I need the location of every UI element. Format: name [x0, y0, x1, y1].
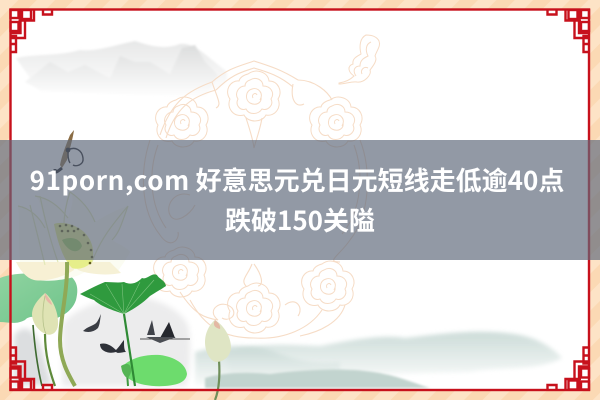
stems	[33, 262, 219, 400]
cloud motif: top	[228, 71, 280, 121]
cloud ring medallion	[143, 61, 367, 338]
grey title band	[0, 140, 600, 260]
cloud motif: upper right	[310, 97, 362, 147]
corner fret: top right	[548, 10, 589, 52]
corner fret: top left	[10, 10, 52, 52]
ink fish: upper	[83, 314, 101, 332]
ink mountains: top left	[16, 41, 227, 98]
cloud motif: lower right	[302, 261, 354, 311]
small flying cloud	[339, 35, 380, 84]
cloud motif: bottom	[228, 283, 280, 333]
dragonfly	[55, 130, 83, 172]
light green lotus leaf	[0, 272, 77, 323]
cloud motif: lower left	[154, 247, 206, 297]
connecting scroll lines	[143, 61, 367, 338]
ink mountains: bottom right	[195, 332, 562, 388]
title	[30, 161, 564, 238]
central dark green lotus leaf	[80, 274, 166, 314]
lotus bud: left	[32, 293, 58, 335]
ink fish: lower	[100, 340, 126, 353]
lotus bud: right	[205, 320, 231, 362]
lotus seed pod	[54, 223, 93, 269]
corner fret: bottom right	[548, 348, 589, 390]
lotus flower	[16, 192, 130, 281]
title: 91porn,com 好意思元兑日元短线走低逾40点	[30, 161, 564, 198]
small lily leaf	[121, 364, 131, 378]
ink sailboats	[140, 320, 190, 343]
ink wash behind lotus	[14, 296, 190, 386]
title: 跌破150关隘	[225, 201, 375, 238]
cloud motif: upper left	[156, 97, 208, 147]
corner fret: bottom left	[10, 348, 52, 390]
bright green lily pad	[122, 355, 187, 386]
